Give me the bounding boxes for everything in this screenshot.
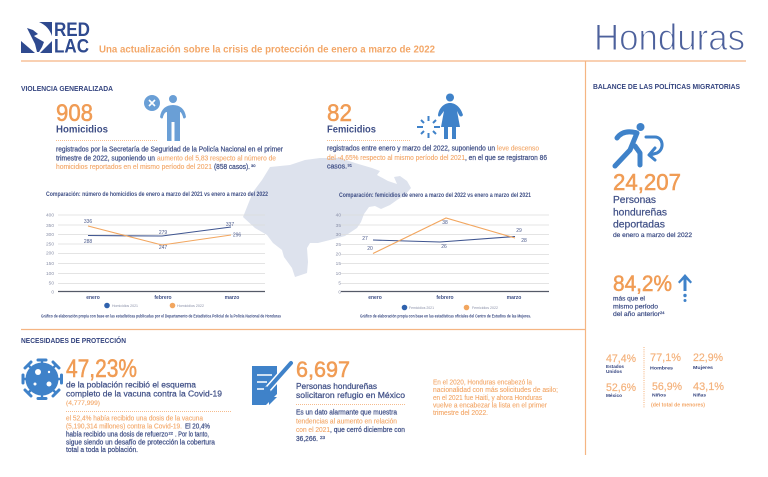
icon: person with x	[144, 95, 186, 141]
chart: homicidios 2021 vs 2022: 150	[46, 261, 54, 267]
chart: femicidios 2021 vs 2022: 27	[362, 236, 368, 242]
stat: 6,697	[296, 357, 405, 404]
text: homicidios: homicidios reportados en el mismo período del 2021	[56, 164, 212, 171]
text: femicidios: leve descenso	[497, 146, 539, 152]
chart: homicidios 2021 vs 2022: 350	[46, 223, 54, 229]
stats: destinos: 52,6%	[606, 382, 636, 394]
map: Honduras silhouette	[243, 158, 411, 277]
stat: 47,23%: 47,23%	[66, 355, 137, 383]
stat: 84,2%: 84,2%	[613, 271, 672, 296]
stats: sexo y edad: 43,1%	[693, 381, 724, 393]
stat: 6,697: Personas hondureñas	[296, 381, 377, 391]
chart: homicidios 2021 vs 2022: 400	[46, 212, 54, 218]
text: homicidios: aumento del 5,83 respecto al número de	[157, 156, 276, 162]
text: femicidios: , en el que se registraron 86	[465, 155, 547, 162]
stat: 24,207: hondureñas	[613, 206, 667, 218]
callout: honduras lidera solicitudes: trimestre del 2022.	[433, 410, 488, 417]
chart: femicidios 2021 vs 2022: 15	[336, 261, 341, 267]
chart: homicidios 2021 vs 2022: 337	[226, 222, 234, 228]
icon: woman with burst	[417, 94, 463, 139]
chart: femicidios 2021 vs 2022: Femicidios 2022	[472, 305, 499, 310]
stats: destinos: Estados	[606, 364, 624, 369]
text: vacunacion: El 20,4%	[185, 424, 210, 430]
chart: homicidios 2021 vs 2022: 300	[46, 232, 54, 238]
stat: 47,23%	[66, 355, 231, 412]
stat: 24,207: Personas	[613, 194, 656, 206]
stat: 82 femicidios	[327, 100, 411, 140]
text: refugio	[296, 410, 405, 443]
chart: femicidios 2021 vs 2022: 28	[521, 238, 527, 244]
chart: homicidios 2021 vs 2022: marzo	[225, 295, 239, 301]
heading: violencia generalizada: VIOLENCIA GENERALIZADA	[21, 84, 114, 93]
text: femicidios: 31	[348, 162, 353, 168]
callout: honduras lidera solicitudes	[433, 380, 558, 417]
stat: 6,697: 6,697	[296, 357, 350, 382]
text: vacunacion: (5,190,314 millones) contra la Covid-19.	[66, 424, 182, 430]
text: refugio: , que cerró diciembre con	[330, 427, 405, 434]
chart: homicidios 2021 vs 2022: 250	[46, 242, 54, 248]
icon: returning runner	[615, 123, 662, 166]
text: homicidios	[56, 146, 284, 171]
stat: 84,2%: 24	[660, 310, 665, 315]
chart: femicidios 2021 vs 2022: 25	[336, 242, 341, 248]
text: vacunacion	[66, 416, 215, 454]
text: refugio: 23	[320, 435, 326, 440]
chart: homicidios 2021 vs 2022: 288	[84, 239, 92, 245]
stat: 47,23%: de la población recibió el esquema	[66, 380, 196, 390]
text: refugio: con el 2021	[296, 427, 330, 434]
text: vacunacion: sigue siendo un desafío de protección la cobertura	[66, 440, 215, 446]
text: homicidios: trimestre de 2022, suponiendo un	[56, 156, 155, 162]
chart: homicidios 2021 vs 2022	[41, 191, 282, 318]
stat: 82 femicidios: 82	[327, 100, 352, 127]
icon: up arrow	[678, 274, 692, 302]
chart: femicidios 2021 vs 2022: 20	[336, 252, 341, 258]
chart: homicidios 2021 vs 2022: Homicidios 2022	[177, 303, 205, 308]
text: refugio: Es un dato alarmante que muestra	[296, 410, 397, 416]
stat: 6,697: solicitaron refugio en México	[296, 390, 405, 400]
stat: 82 femicidios: Femicidios	[327, 124, 376, 136]
panel: violencia generalizada	[21, 84, 547, 171]
chart: homicidios 2021 vs 2022: 50	[49, 280, 54, 286]
stats: destinos: 47,4%	[606, 353, 636, 365]
text: vacunacion: había recibido una dosis de refuerzo	[66, 432, 168, 438]
stat: 47,23%: completo de la vacuna contra la Covid-19	[66, 388, 222, 398]
logo: REDLAC	[21, 20, 90, 58]
chart: femicidios 2021 vs 2022: 26	[441, 244, 447, 250]
text: homicidios: (858 casos).	[214, 164, 250, 171]
chart: homicidios 2021 vs 2022: 100	[46, 271, 54, 277]
chart: femicidios 2021 vs 2022: 35	[336, 223, 341, 229]
text: femicidios	[327, 146, 547, 170]
chart: homicidios 2021 vs 2022: enero	[86, 295, 100, 301]
text: vacunacion: 22	[168, 430, 174, 436]
chart: homicidios 2021 vs 2022: Gráfico de elaboración propia con base en las estadísticas publicadas por el Departamento de Estadística Policial de la Policía Nacional de Honduras	[41, 314, 282, 318]
heading: balance: BALANCE DE LAS POLÍTICAS MIGRATORIAS	[593, 82, 740, 91]
text: homicidios: registrados por la Secretaría de Seguridad de la Policía Nacional en el primer	[56, 146, 284, 154]
chart: homicidios 2021 vs 2022: 336	[84, 219, 92, 225]
stats: destinos: México	[606, 393, 622, 398]
chart: homicidios 2021 vs 2022: 200	[46, 250, 54, 256]
chart: femicidios 2021 vs 2022	[336, 192, 549, 318]
stat: 908 homicidios	[56, 100, 157, 140]
stats: destinos	[606, 353, 636, 398]
stats: sexo y edad: 56,9%	[652, 381, 682, 393]
chart: homicidios 2021 vs 2022: 279	[159, 230, 167, 236]
callout: honduras lidera solicitudes: vuelve a encabezar la lista en el primer	[433, 402, 548, 410]
chart: femicidios 2021 vs 2022: 10	[336, 271, 341, 277]
chart: femicidios 2021 vs 2022: 40	[336, 212, 341, 218]
chart: femicidios 2021 vs 2022: Comparación: femicidios de enero a marzo del 2022 vs enero a marzo del 2021	[339, 192, 531, 199]
chart: femicidios 2021 vs 2022: 5	[338, 280, 341, 286]
panel: necesidades de proteccion	[21, 336, 558, 454]
text: femicidios: del -4,65% respecto al mismo período del 2021	[327, 155, 465, 162]
stat: 84,2%: más que el	[613, 296, 646, 302]
callout: honduras lidera solicitudes: En el 2020, Honduras encabezó la	[433, 380, 532, 386]
stat: 84,2%	[613, 271, 672, 318]
stats: sexo y edad: 77,1%	[650, 352, 681, 364]
stats: sexo y edad: Mujeres	[693, 365, 713, 370]
icon: virus	[22, 359, 62, 399]
chart: homicidios 2021 vs 2022: Homicidios 2021	[112, 303, 139, 308]
stats: sexo y edad: Niños	[652, 392, 666, 398]
chart: homicidios 2021 vs 2022: Comparación: número de homicidios de enero a marzo del 2021 vs enero a marzo del 2022	[46, 191, 268, 198]
chart: femicidios 2021 vs 2022: 30	[336, 232, 341, 238]
chart: femicidios 2021 vs 2022: marzo	[507, 295, 521, 301]
stats: sexo y edad: Hombres	[650, 366, 674, 370]
stat: 47,23%: (4,777,999)	[66, 400, 100, 407]
text: femicidios: registrados entre enero y marzo del 2022, suponiendo un	[327, 146, 495, 152]
chart: homicidios 2021 vs 2022: febrero	[154, 295, 172, 301]
stat: 908 homicidios: Homicidios	[56, 124, 108, 136]
chart: femicidios 2021 vs 2022: 20	[367, 246, 373, 252]
stats: sexo y edad	[650, 352, 724, 408]
chart: femicidios 2021 vs 2022: febrero	[436, 295, 454, 301]
stat: 24,207: de enero a marzo del 2022	[613, 232, 692, 239]
heading: necesidades: NECESIDADES DE PROTECCIÓN	[21, 336, 126, 345]
text: vacunacion: . Por lo tanto,	[175, 432, 209, 438]
panel: balance de las politicas migratorias	[593, 82, 740, 408]
stat: 84,2%: del año anterior	[613, 311, 661, 318]
stat: 84,2%: mismo período	[613, 304, 658, 310]
logo: REDLAC: LAC	[54, 36, 89, 58]
chart: femicidios 2021 vs 2022: 29	[516, 228, 522, 234]
chart: homicidios 2021 vs 2022: 247	[159, 245, 167, 251]
icon: document and pen	[252, 363, 291, 405]
chart: femicidios 2021 vs 2022: Femicidios 2021	[409, 305, 435, 310]
stat: 24,207: deportadas	[613, 218, 665, 230]
callout: honduras lidera solicitudes: en el 2021 fue Haití, y ahora Honduras	[433, 395, 542, 402]
stats: sexo y edad: 22,9%	[693, 352, 723, 364]
stats: destinos: Unidos	[606, 369, 622, 374]
chart: femicidios 2021 vs 2022: enero	[368, 295, 382, 301]
stat: 24,207	[613, 169, 692, 239]
chart: femicidios 2021 vs 2022: Gráfico de elaboración propia con base en las estadísticas oficiales del Centro de Estudios de las Mujeres.	[360, 314, 531, 318]
stats: sexo y edad: Niñas	[693, 392, 706, 398]
chart: homicidios 2021 vs 2022: 296	[233, 232, 241, 238]
text: refugio: tendencias al aumento en relación	[296, 418, 397, 426]
chart: femicidios 2021 vs 2022: 0	[338, 290, 341, 296]
text: refugio: 36,266.	[296, 436, 318, 443]
stat: 908 homicidios: 908	[56, 100, 93, 127]
subtitle: Una actualización sobre la crisis de protección de enero a marzo de 2022	[99, 44, 435, 56]
logo: REDLAC: RED	[54, 20, 90, 41]
text: femicidios: casos.	[327, 164, 347, 170]
chart: femicidios 2021 vs 2022: 38	[442, 220, 448, 226]
chart: homicidios 2021 vs 2022: 0	[51, 290, 54, 296]
callout: honduras lidera solicitudes: nacionalidad con más solicitudes de asilo;	[433, 387, 558, 394]
stats: sexo y edad: (del total de menores)	[651, 402, 705, 408]
text: homicidios: 30	[251, 163, 256, 168]
text: vacunacion: el 52,4% había recibido una dosis de la vacuna	[66, 416, 203, 422]
text: vacunacion: total a toda la población.	[66, 447, 138, 454]
title: Honduras: Honduras	[594, 17, 745, 58]
stat: 24,207: 24,207	[613, 169, 681, 195]
